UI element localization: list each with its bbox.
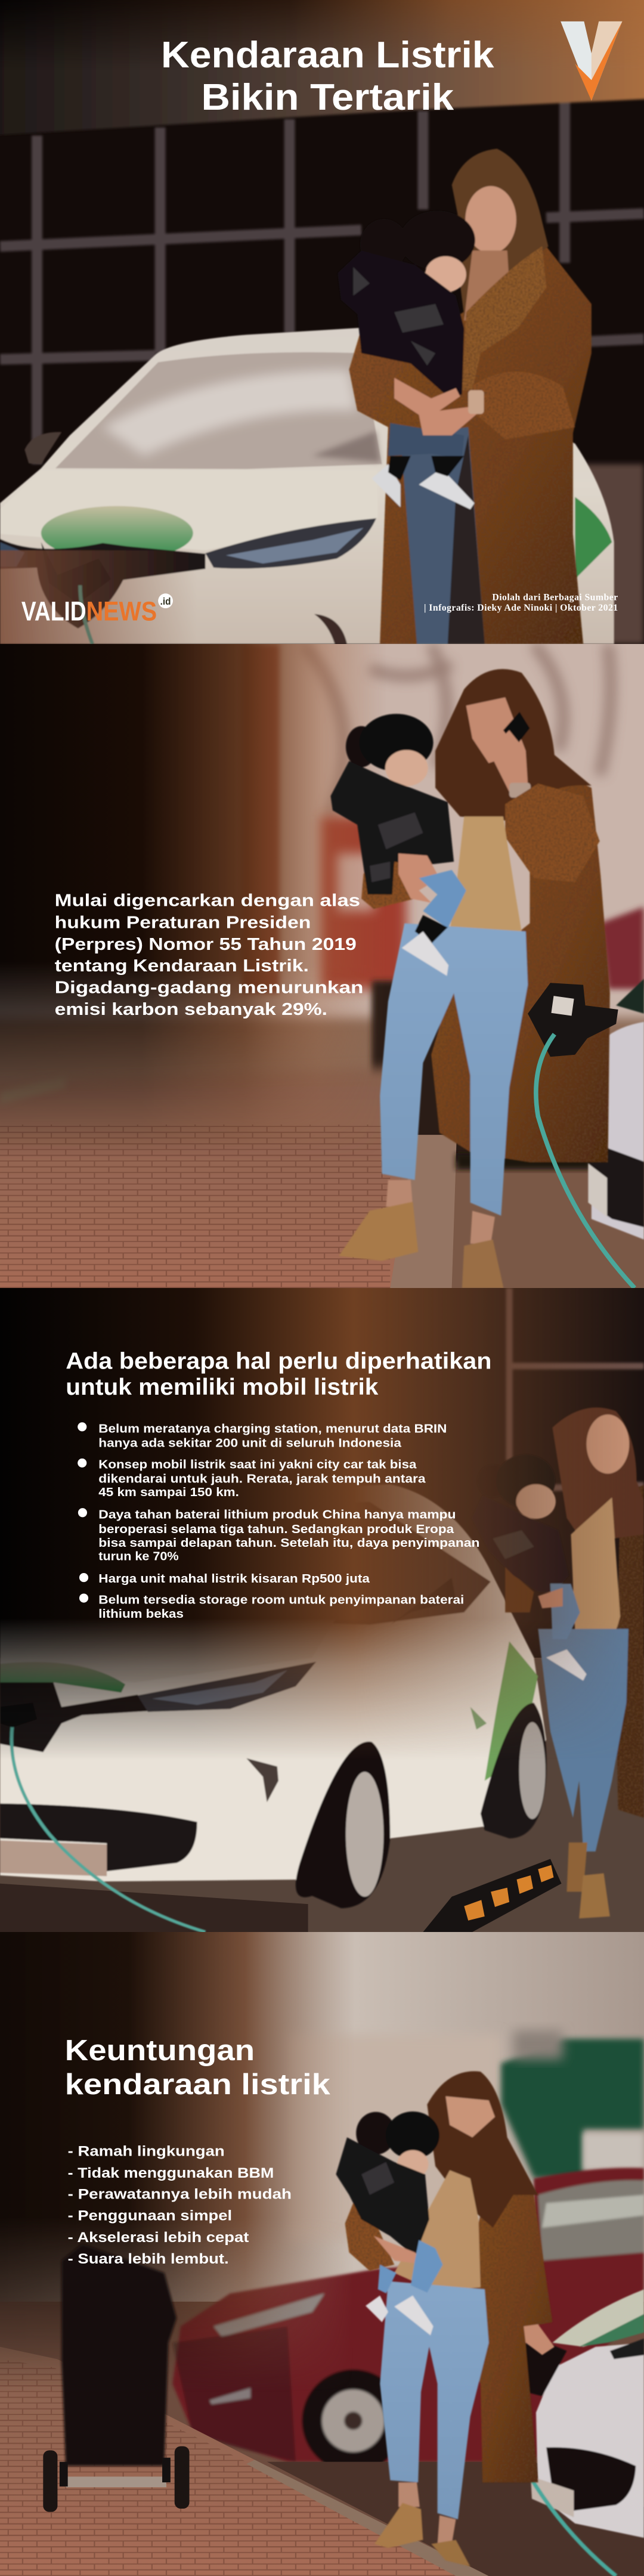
title: Bikin Tertarik: [202, 77, 454, 118]
bullet list: 45 km sampai 150 km.: [98, 1485, 239, 1499]
benefits list: - Suara lebih lembut.: [68, 2251, 229, 2267]
title: Kendaraan Listrik: [161, 35, 494, 76]
left dark overlay: [0, 1932, 644, 2392]
logo: Validnews.id: VALID: [21, 596, 86, 627]
logo: Validnews.id: .id: [160, 596, 171, 607]
text block: intro: tentang Kendaraan Listrik.: [55, 956, 309, 976]
woman and child: [336, 2071, 555, 2566]
electric car and charger: [583, 979, 644, 1240]
text block: intro: (Perpres) Nomor 55 Tahun 2019: [55, 935, 357, 954]
bullet list: Konsep mobil listrik saat ini yakni city car tak bisa: [98, 1457, 417, 1471]
wheel stops: [423, 1859, 562, 1932]
bullet list: dikendarai untuk jauh. Rerata, jarak tempuh antara: [98, 1472, 426, 1485]
panel: benefits: [0, 1932, 644, 2576]
icon: V logo: [561, 21, 623, 101]
heading: untuk memiliki mobil listrik: [66, 1374, 379, 1400]
bullet list: Daya tahan baterai lithium produk China hanya mampu: [98, 1507, 456, 1521]
electric car: [0, 1484, 547, 1932]
bullet list: Harga unit mahal listrik kisaran Rp500 juta: [98, 1572, 370, 1586]
heading: Keuntungan: [65, 2033, 255, 2067]
heading: Ada beberapa hal perlu diperhatikan: [66, 1349, 491, 1374]
panel: cover: [0, 0, 644, 644]
charging plug and cable: [528, 983, 634, 1288]
text block: intro: Mulai digencarkan dengan alas: [55, 891, 360, 910]
background: [0, 1932, 644, 2576]
brick pavement: [0, 2347, 644, 2576]
panel: Perpres background: [0, 624, 644, 1301]
credit text: [424, 592, 618, 613]
white car with charger: [493, 2289, 644, 2576]
panel: considerations: [0, 1288, 644, 1932]
bullet list: lithium bekas: [98, 1607, 184, 1621]
woman and child: [330, 669, 610, 1288]
bullet list: bisa sampai delapan tahun. Setelah itu, daya penyimpanan: [98, 1536, 479, 1550]
bullet list: turun ke 70%: [98, 1550, 179, 1563]
benefits list: - Ramah lingkungan: [68, 2143, 225, 2159]
text block: intro: emisi karbon sebanyak 29%.: [55, 1000, 327, 1019]
logo: Validnews.id: NEWS: [86, 596, 157, 627]
electric car: [0, 328, 614, 644]
credit text: | Infografis: Dieky Ade Ninoki | Oktober 2021: [424, 603, 618, 613]
bullet list: hanya ada sekitar 200 unit di seluruh Indonesia: [98, 1436, 401, 1450]
building background: [0, 0, 644, 644]
dark overlay: [0, 1288, 644, 1760]
benefits list: - Tidak menggunakan BBM: [68, 2165, 274, 2181]
heading: kendaraan listrik: [65, 2067, 330, 2101]
text block: intro: [55, 891, 364, 1019]
text block: intro: Digadang-gadang menurunkan: [55, 978, 364, 997]
credit text: Diolah dari Berbagai Sumber: [492, 592, 618, 602]
logo: Validnews.id: [21, 593, 173, 621]
bullet list: beroperasi selama tiga tahun. Sedangkan produk Eropa: [98, 1522, 454, 1536]
street background: [0, 624, 644, 1301]
woman and child: [338, 148, 592, 644]
bullet list: Belum meratanya charging station, menurut data BRIN: [98, 1422, 447, 1435]
benefits list: [68, 2143, 292, 2267]
stroller: [43, 2244, 190, 2512]
title: [163, 41, 494, 110]
benefits list: - Akselerasi lebih cepat: [68, 2230, 249, 2246]
heading: [65, 2033, 330, 2101]
woman and child: [472, 1407, 644, 1918]
text block: intro: hukum Peraturan Presiden: [55, 914, 311, 933]
heading: [66, 1349, 491, 1400]
bullet list: Belum tersedia storage room untuk penyimpanan baterai: [98, 1593, 464, 1607]
background: [0, 1288, 644, 1932]
benefits list: - Perawatannya lebih mudah: [68, 2187, 292, 2203]
red car: [172, 2168, 644, 2472]
bullet list: [78, 1422, 479, 1621]
benefits list: - Penggunaan simpel: [68, 2208, 232, 2224]
